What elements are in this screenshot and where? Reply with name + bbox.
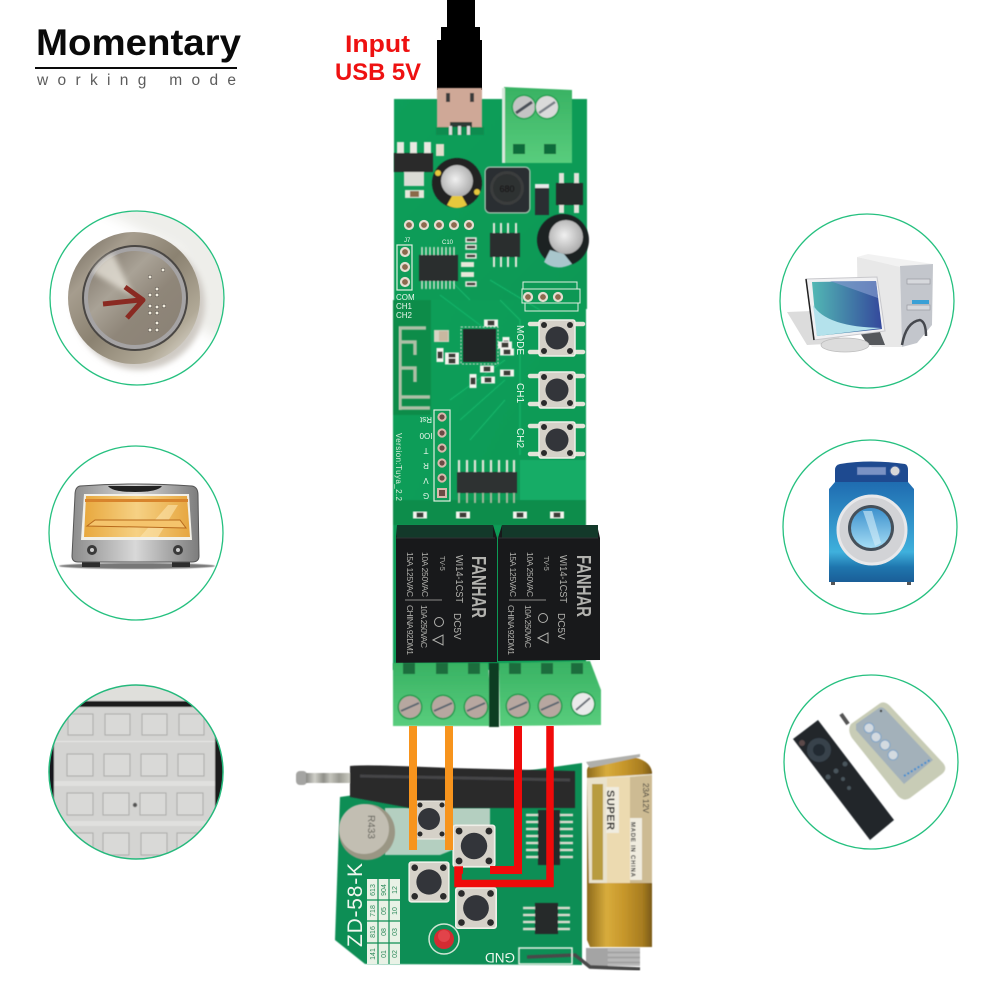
red wire 1 [490, 726, 518, 870]
code table [367, 879, 400, 964]
title block [35, 22, 241, 89]
battery: 23A 12V [641, 783, 650, 814]
micro USB connector [436, 88, 484, 135]
module antenna [296, 765, 575, 808]
battery: SUPER [604, 790, 616, 830]
relay left: WI14-1CST [453, 555, 464, 603]
header J6 [419, 410, 450, 501]
header J6: G [423, 491, 429, 500]
header J6: V [423, 476, 429, 485]
icon: elevator push button [50, 205, 240, 385]
crystal can: R433 [365, 815, 376, 839]
code table: 613 [370, 884, 377, 896]
orange wire 2 [445, 726, 453, 850]
header labels COM CH1 CH2: CH2 [396, 311, 413, 320]
relay right: 10A 250VAC [525, 552, 535, 597]
through holes and header J7 [397, 221, 580, 311]
relay left: TV-5 [438, 556, 445, 571]
button labels: MODE [514, 325, 525, 355]
button labels [514, 325, 525, 448]
code table: 12 [392, 886, 399, 894]
icon: desktop computer [780, 214, 954, 388]
header labels COM CH1 CH2: CH1 [396, 302, 413, 311]
header labels COM CH1 CH2 [396, 238, 454, 320]
red LED [429, 924, 459, 954]
code table: 02 [392, 950, 399, 958]
module ICs [523, 810, 573, 934]
relay right: WI14-1CST [557, 555, 568, 603]
antenna trace [400, 328, 430, 410]
relay right: 15A 125VAC [508, 552, 518, 597]
relay left: CHINA 92DM1 [405, 605, 415, 655]
USB cable plug [437, 0, 482, 90]
orange wire 1 [409, 726, 417, 850]
code table: 718 [370, 905, 377, 917]
header J6: IO0 [419, 431, 432, 440]
header J6: Rst [419, 415, 432, 424]
bottom screw terminals [393, 661, 601, 727]
relay left: 15A 125VAC [405, 552, 415, 597]
relay left [396, 525, 497, 663]
code table: 01 [381, 950, 388, 958]
driver ICs [419, 223, 520, 289]
RF remote module [296, 754, 652, 969]
icon: garage door [49, 685, 224, 860]
button labels: CH2 [514, 428, 525, 448]
button labels: CH1 [514, 383, 525, 403]
module PCB [335, 763, 582, 965]
relay right: 10A 250VAC [523, 605, 533, 648]
black remote [793, 720, 894, 840]
power components: 680 [499, 184, 515, 194]
tactile buttons MODE CH1 CH2 [530, 320, 583, 458]
code table: 05 [381, 907, 388, 915]
relay driver IC [457, 460, 517, 503]
relay right: TV-5 [542, 556, 549, 571]
red wire 2 [458, 726, 550, 884]
relay right: CHINA 92DM1 [506, 605, 516, 655]
header labels COM CH1 CH2: J7 [404, 238, 411, 244]
top screw terminal [502, 87, 572, 163]
power components [394, 142, 589, 268]
icon: toaster oven [49, 446, 223, 620]
code table: 08 [381, 928, 388, 936]
label: input USB 5V: USB 5V [335, 59, 421, 86]
PCB substrate [393, 99, 587, 670]
code table: 03 [392, 928, 399, 936]
icon: washing machine [783, 440, 957, 614]
code table: 904 [381, 884, 388, 896]
GND label: GND [485, 950, 515, 966]
label: input USB 5V [335, 31, 421, 86]
relay right: FANHAR [572, 555, 594, 617]
main relay board [393, 87, 601, 727]
version label: Version:Tuya_2.2 [394, 433, 403, 502]
relay left: 10A 250VAC [420, 552, 430, 597]
header J6: R [423, 461, 429, 470]
icon: remote controls [784, 675, 958, 849]
code table: 10 [392, 907, 399, 915]
label: input USB 5V: Input [345, 31, 410, 58]
title: Momentary: Momentary [36, 22, 241, 63]
relay right [498, 525, 600, 661]
code table: 816 [370, 926, 377, 938]
battery spring contact [519, 948, 640, 969]
status LEDs and resistors [413, 512, 564, 518]
module tactile buttons [409, 801, 496, 928]
header labels COM CH1 CH2: C10 [442, 240, 454, 246]
subtitle: working mode: working mode [36, 72, 236, 89]
grey RF remote [841, 702, 945, 800]
relay left: 10A 250VAC [419, 605, 429, 648]
relay right: DC5V [555, 613, 566, 640]
crystal can [339, 804, 395, 860]
Wi-Fi chip [434, 320, 514, 388]
battery: MADE IN CHINA [629, 822, 635, 878]
model label ZD-58-K: ZD-58-K [344, 863, 367, 947]
header J6: T [423, 446, 428, 455]
relay left: DC5V [451, 613, 462, 640]
header labels COM CH1 CH2: COM [396, 293, 415, 302]
relay left: FANHAR [467, 556, 489, 618]
battery [586, 754, 652, 947]
silver board patch [385, 808, 490, 855]
code table: 141 [370, 948, 377, 960]
